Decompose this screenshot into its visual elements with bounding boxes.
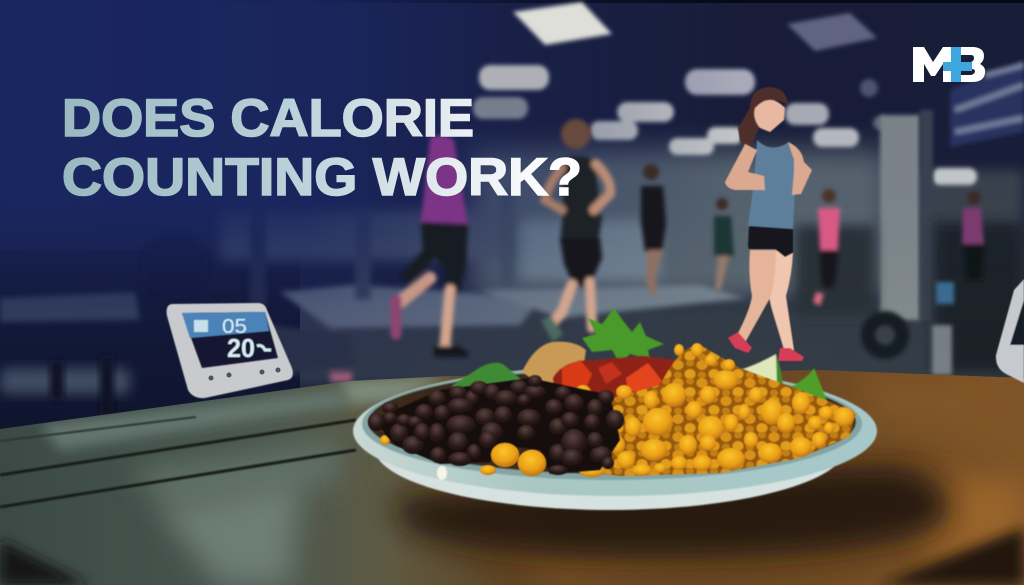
title: COUNTING WORK? — [62, 148, 582, 207]
table — [0, 360, 1024, 585]
ceiling lights — [0, 5, 977, 185]
wood highlights and shadows — [0, 376, 1024, 585]
face — [754, 100, 785, 132]
title — [62, 89, 582, 207]
garnish, tortilla and lime — [451, 308, 829, 410]
arms — [725, 144, 765, 190]
monitor screen — [182, 312, 278, 368]
hair — [738, 87, 788, 148]
runner: purple top — [396, 135, 468, 357]
plate glint — [437, 466, 447, 480]
shoes — [728, 332, 752, 353]
ceiling lights above overlay — [473, 2, 612, 119]
right wall screen and column — [795, 60, 1024, 372]
navy overlay — [0, 0, 1024, 440]
back leg — [768, 250, 794, 353]
treadmills and left equipment — [0, 180, 952, 415]
monitor screen: 05 — [222, 316, 247, 338]
plate shadow — [392, 465, 950, 560]
monitor screen: 20 — [227, 333, 255, 363]
logo — [913, 47, 985, 82]
title: DOES CALORIE — [62, 89, 474, 148]
runner: center black outfit — [541, 119, 610, 342]
plate — [353, 366, 877, 510]
shorts — [748, 226, 793, 257]
plate of food — [353, 308, 877, 510]
tank top — [748, 140, 796, 229]
right edge device — [996, 279, 1024, 383]
black beans — [368, 375, 624, 476]
monitor device — [167, 303, 293, 398]
runner: background figures — [641, 164, 984, 306]
corn among beans — [491, 443, 546, 476]
salsa — [553, 356, 705, 402]
corn — [380, 343, 856, 477]
runner: main foreground — [725, 87, 812, 361]
front leg — [737, 250, 776, 341]
